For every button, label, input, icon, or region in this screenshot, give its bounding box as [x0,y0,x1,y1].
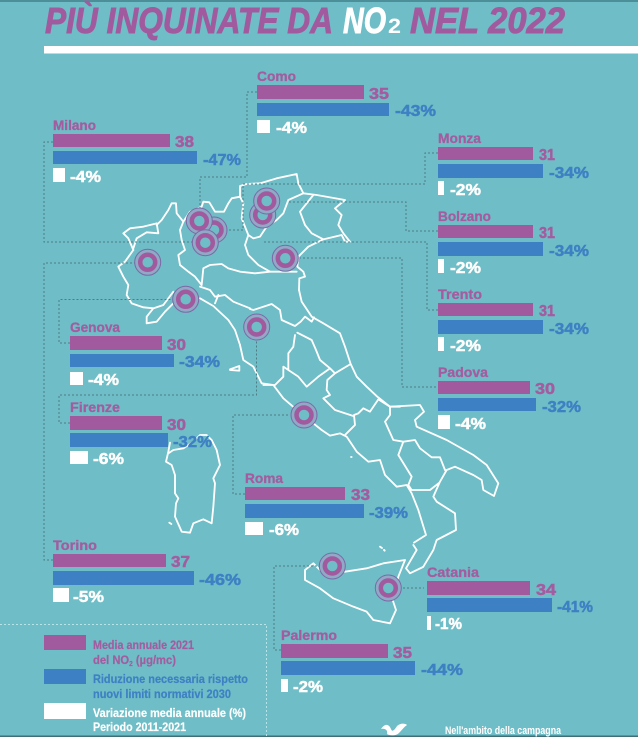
panel: Roma: -6% [269,522,299,539]
panel: Padova: 30 [535,381,555,398]
panel: Milano: -47% [203,152,241,169]
panel: Firenze: Firenze [70,399,120,415]
legend: (µg/mc) [133,653,176,667]
footer text: Nell'ambito della campagna [445,725,562,737]
panel: Bolzano: Bolzano [438,208,491,224]
panel: Monza: -34% [549,165,589,182]
connector lines [44,92,438,650]
icon: footer logo [381,724,407,735]
panel: Como: -43% [395,103,436,120]
title: PIÙ INQUINATE DA [45,0,333,41]
panel: Palermo: -44% [421,662,463,679]
map markers [135,188,401,601]
panel: Palermo: Palermo [281,627,337,643]
panel: Trento: -34% [549,321,589,338]
panel: Trento [438,286,589,355]
panel: Monza: Monza [438,130,481,146]
panel: Catania: -41% [557,599,593,616]
panel: Genova: Genova [70,319,120,335]
panel: Palermo: -2% [293,679,323,696]
panel: Palermo: 35 [393,645,412,662]
panel: Torino: -46% [199,572,241,589]
legend: Riduzione necessaria rispetto [93,672,248,686]
panel: Padova: -32% [542,399,581,416]
panel: Firenze: 30 [167,417,186,434]
panel: Roma: 33 [351,487,370,504]
legend: nuovi limiti normativi 2030 [93,687,231,701]
panel: Genova [70,319,220,389]
legend: 2 [129,661,133,668]
legend [0,624,266,737]
panel: Como: 35 [369,86,389,103]
panel: Trento: Trento [438,286,482,302]
panel: Monza: 31 [539,147,555,164]
panel: Trento: 31 [539,303,555,320]
panel: Bolzano: 31 [539,225,555,242]
panel: Torino: 37 [171,554,190,571]
panel: Como [257,68,436,137]
title [45,0,565,41]
panel: Monza [438,130,589,199]
panel: Firenze [70,399,212,468]
legend: Periodo 2011-2021 [93,720,186,734]
panel: Bolzano [438,208,589,277]
panel: Padova: Padova [438,364,488,380]
title: 2 [388,15,401,38]
panel: Genova: 30 [167,337,186,354]
panel: Catania: Catania [427,564,479,580]
title: NO [343,0,386,41]
panel: Roma: -39% [369,505,408,522]
panel: Firenze: -32% [173,434,212,451]
panel: Bolzano: -2% [450,260,481,277]
panel: Roma: Roma [245,470,283,486]
map of Italy [118,174,498,623]
panel: Milano: 38 [175,134,194,151]
panel: Torino: Torino [53,537,97,553]
panel: Milano: Milano [53,117,96,133]
title: NEL 2022 [410,0,565,41]
panel: Genova: -4% [88,372,119,389]
panel: Padova: -4% [455,416,486,433]
panel: Milano: -4% [70,169,101,186]
legend: Variazione media annuale (%) [93,706,246,720]
panel: Trento: -2% [450,338,481,355]
panel: Como: -4% [276,120,307,137]
panel: Firenze: -6% [93,451,124,468]
panel: Genova: -34% [179,354,220,371]
panel: Catania: 34 [536,582,556,599]
panel: Roma [245,470,408,539]
panel: Palermo [281,627,463,696]
panel: Padova [438,364,581,433]
panel: Catania [427,564,593,633]
legend: del NO [93,653,132,667]
panel: Torino [53,537,241,606]
panel: Catania: -1% [435,616,462,633]
panel: Torino: -5% [73,589,104,606]
panel: Monza: -2% [450,182,481,199]
panel: Milano [53,117,241,186]
panel: Como: Como [257,68,296,84]
legend: Media annuale 2021 [93,638,194,652]
panel: Bolzano: -34% [549,243,589,260]
